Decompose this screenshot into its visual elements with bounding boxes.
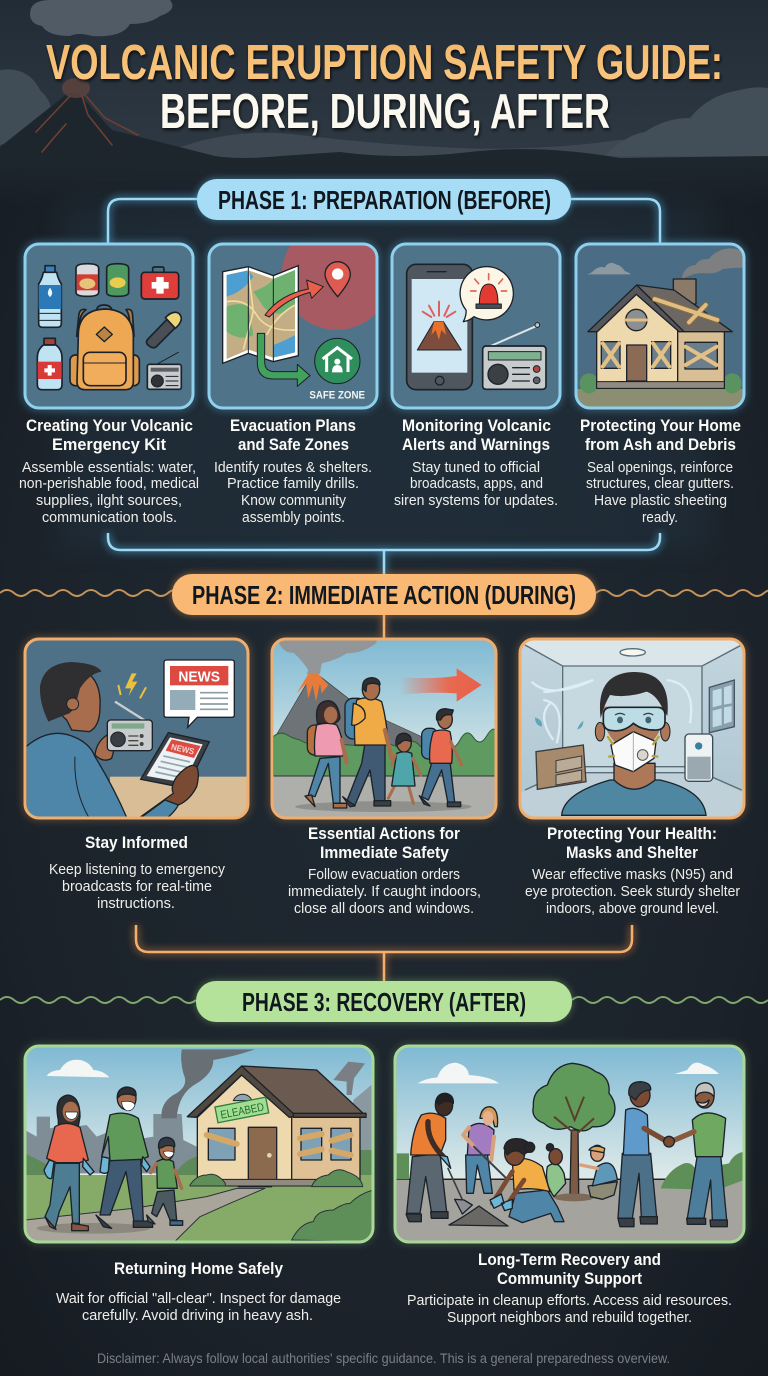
body: non-perishable food, medical <box>19 476 199 492</box>
body <box>214 460 372 526</box>
body: broadcasts, apps, and <box>410 476 543 492</box>
body: Keep listening to emergency <box>49 862 226 878</box>
dirt pile <box>449 1206 508 1226</box>
heading: Alerts and Warnings <box>402 436 550 454</box>
body: ready. <box>642 510 678 526</box>
text: stay informed <box>49 834 226 912</box>
heading: Stay Informed <box>85 834 188 852</box>
body <box>586 460 734 526</box>
icon: phone alert and radio <box>407 264 546 390</box>
label: cleared sign: ELEABED <box>220 1101 265 1122</box>
label: safe zone: SAFE ZONE <box>309 389 365 401</box>
heading: Protecting Your Health: <box>547 825 717 843</box>
heading: Evacuation Plans <box>230 417 356 435</box>
icon: evacuation map <box>222 246 376 398</box>
body: broadcasts for real-time <box>62 879 212 895</box>
heading: Community Support <box>497 1270 642 1288</box>
body: assembly points. <box>242 510 345 526</box>
man in orange <box>407 1153 447 1213</box>
panel: protecting health <box>520 638 744 818</box>
heading <box>547 825 717 862</box>
panel: evacuation plans <box>209 220 392 408</box>
body: supplies, ilght sources, <box>36 493 182 509</box>
phase 3 wave divider <box>0 997 768 1003</box>
heading <box>478 1251 661 1288</box>
text: protecting home <box>580 417 741 526</box>
body <box>288 867 481 917</box>
phase 3 heading pill <box>196 981 572 1022</box>
phase 2 heading pill <box>172 574 596 615</box>
illustration: person with radio and tablet <box>26 660 250 818</box>
body: siren systems for updates. <box>394 493 558 509</box>
body: Seal openings, reinforce <box>587 460 733 476</box>
heading <box>580 417 741 454</box>
boy <box>422 728 438 759</box>
woman <box>57 1095 80 1127</box>
body: Wear effective masks (N95) and <box>532 867 733 883</box>
body: instructions. <box>97 896 175 912</box>
phase 1 connector bracket <box>108 199 660 574</box>
panel: monitoring alerts <box>392 244 560 408</box>
heading: Returning Home Safely <box>114 1260 284 1278</box>
panel: stay informed <box>25 639 250 818</box>
label: tablet news: NEWS <box>170 742 195 757</box>
heading: Masks and Shelter <box>566 844 699 862</box>
icon: emergency kit items <box>37 264 181 390</box>
panel: returning home <box>25 1046 373 1242</box>
heading <box>402 417 551 454</box>
small helper left <box>546 1164 566 1197</box>
body <box>56 1291 341 1324</box>
illustration: community cleanup <box>396 1046 744 1243</box>
illustration: person with goggles and N95 mask <box>520 638 744 818</box>
phase 3 heading pill: PHASE 3: RECOVERY (AFTER) <box>242 989 526 1017</box>
man shaking hands right <box>687 1155 727 1220</box>
heading <box>26 417 193 454</box>
text: returning home <box>56 1260 341 1324</box>
body: indoors, above ground level. <box>546 901 719 917</box>
heading: from Ash and Debris <box>585 436 736 454</box>
body: close all doors and windows. <box>294 901 474 917</box>
child <box>388 785 413 803</box>
heading: Protecting Your Home <box>580 417 741 435</box>
body: eye protection. Seek sturdy shelter <box>525 884 740 900</box>
man <box>347 743 385 805</box>
heading: Monitoring Volcanic <box>402 417 551 435</box>
illustration: family evacuating <box>272 637 497 819</box>
disclaimer: Disclaimer: Always follow local authorities' specific guidance. This is a general preparedness overview. <box>97 1350 670 1366</box>
body: structures, clear gutters. <box>586 476 734 492</box>
woman <box>306 724 317 756</box>
text: long-term recovery <box>407 1251 732 1326</box>
woman with rake <box>466 1153 492 1193</box>
heading <box>230 417 356 454</box>
heading: Essential Actions for <box>308 825 461 843</box>
heading: Emergency Kit <box>52 436 166 454</box>
icon: boarded house <box>576 248 743 408</box>
text: protecting health <box>525 825 740 917</box>
body: immediately. If caught indoors, <box>288 884 481 900</box>
body: Stay tuned to official <box>412 460 540 476</box>
panel: essential actions <box>272 637 497 819</box>
heading: and Safe Zones <box>238 436 349 454</box>
text: monitoring alerts <box>394 417 558 509</box>
body <box>19 460 199 526</box>
man shaking hands left <box>618 1153 657 1218</box>
phase 2 heading pill: PHASE 2: IMMEDIATE ACTION (DURING) <box>192 582 576 610</box>
label: news: NEWS <box>178 670 220 686</box>
body: Have plastic sheeting <box>594 493 727 509</box>
body: Assemble essentials: water, <box>22 460 196 476</box>
text: evacuation plans <box>214 417 372 526</box>
phase 1 heading pill: PHASE 1: PREPARATION (BEFORE) <box>218 187 551 215</box>
illustration: family returning home <box>25 1046 373 1242</box>
header scene: volcano and ash clouds <box>0 0 768 205</box>
phase 2 connector <box>136 615 632 981</box>
body <box>525 867 740 917</box>
body <box>49 862 226 912</box>
title <box>46 36 723 139</box>
title line 2: BEFORE, DURING, AFTER <box>160 85 610 139</box>
heading: Creating Your Volcanic <box>26 417 193 435</box>
body: Practice family drills. <box>227 476 359 492</box>
kneeling woman <box>509 1190 564 1223</box>
body: Participate in cleanup efforts. Access aid resources. <box>407 1293 732 1309</box>
heading <box>308 825 461 862</box>
body: carefully. Avoid driving in heavy ash. <box>82 1308 313 1324</box>
body: Know community <box>241 493 347 509</box>
boy <box>152 1190 177 1220</box>
body: communication tools. <box>42 510 177 526</box>
phase 2 wave divider <box>0 590 768 596</box>
body: Follow evacuation orders <box>308 867 460 883</box>
body: Identify routes & shelters. <box>214 460 372 476</box>
body <box>394 460 558 509</box>
phase 1 background haze <box>60 205 710 550</box>
panel: long-term recovery <box>395 1046 744 1243</box>
text: emergency kit <box>19 417 199 526</box>
body: Wait for official "all-clear". Inspect for damage <box>56 1291 341 1307</box>
heading: Long-Term Recovery and <box>478 1251 661 1269</box>
panel: protecting home <box>576 244 744 408</box>
body <box>407 1293 732 1326</box>
body: Support neighbors and rebuild together. <box>447 1310 692 1326</box>
phase 1 heading pill <box>197 179 571 220</box>
man <box>100 1158 143 1222</box>
heading: Immediate Safety <box>320 844 450 862</box>
panel: emergency kit <box>25 244 193 408</box>
text: essential actions <box>288 825 481 917</box>
small helper right <box>588 1182 617 1199</box>
